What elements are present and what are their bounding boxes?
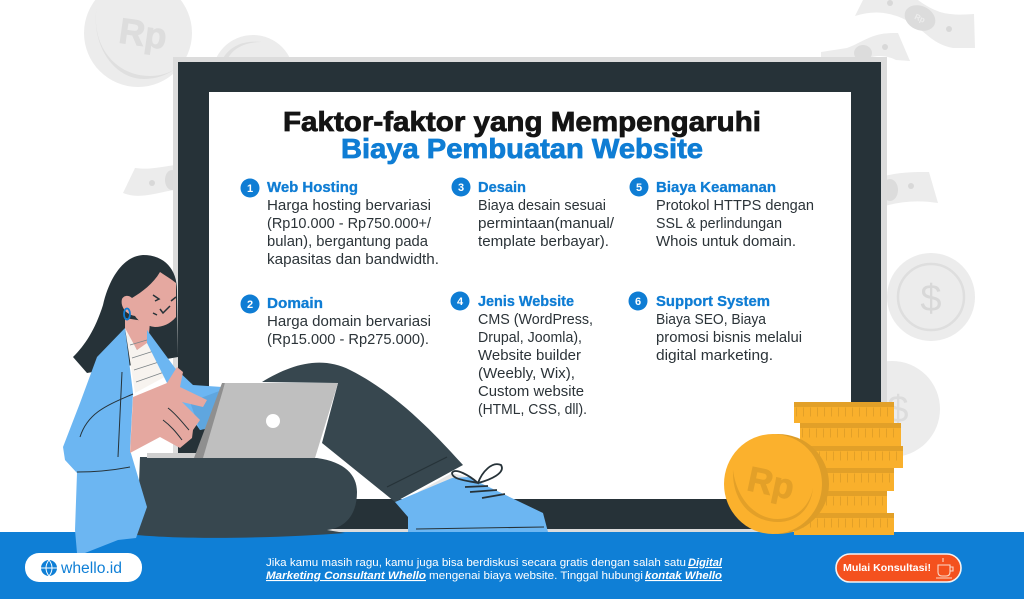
factor 4: jenis website: Jenis Website [478,294,574,310]
factor 2: domain: 2 [247,299,253,311]
factor 4: jenis website: (HTML, CSS, dll). [478,402,587,418]
icon: rupiah coin top left [84,0,192,87]
factor 4: jenis website: (Weebly, Wix), [478,366,575,382]
shoe [395,464,548,532]
icon: dollar coin lower right [844,361,940,457]
factor 6: support system: Biaya SEO, Biaya [656,312,767,328]
factor 4: jenis website [450,292,593,418]
footer message: Marketing Consultant Whello [266,570,426,582]
logo badge [25,553,142,582]
factor 3: desain: 3 [458,182,464,194]
title [283,106,761,164]
factor 1: web hosting: (Rp10.000 - Rp750.000+/ [267,216,432,232]
icon: dollar coin right [887,253,975,341]
logo badge: whello.id [60,560,122,577]
icon: dollar coin lower right: $ [887,389,909,431]
face [122,272,176,327]
factor 1: web hosting: Harga hosting bervariasi [267,198,431,214]
factor 5: biaya keamanan: Whois untuk domain. [656,234,796,250]
lap [137,457,357,538]
factor 5: biaya keamanan: 5 [636,182,642,194]
factor 4: jenis website: 4 [457,296,464,308]
factor 4: jenis website: Drupal, Joomla), [478,330,582,346]
neck [125,318,150,350]
board frame [173,57,887,533]
illustration: woman with laptop [63,255,548,553]
factor 3: desain: template berbayar). [478,234,609,250]
icon: banknote left [123,165,179,196]
jacket [63,328,222,553]
icon: banknote top right [855,0,975,48]
footer message: kontak Whello [645,570,722,582]
icon: coin behind frame [212,35,294,117]
footer message [266,557,723,582]
factor 2: domain: Domain [267,296,323,312]
footer message: Jika kamu masih ragu, kamu juga bisa berdiskusi secara gratis dengan salah satu [266,557,686,569]
call to action button [836,554,961,582]
factor 6: support system: digital marketing. [656,348,773,364]
factor 6: support system [628,292,802,364]
icon: globe [41,560,57,576]
icon: dollar coin right: $ [920,278,942,320]
hand [130,367,207,453]
factor 3: desain [452,178,615,250]
factor 5: biaya keamanan [630,178,814,250]
icon: coffee cup [936,558,953,578]
factor 1: web hosting [240,178,439,268]
title: Faktor-faktor yang Mempengaruhi [283,106,761,137]
footer message: Digital [688,557,723,569]
hair [73,255,178,373]
factor 5: biaya keamanan: Protokol HTTPS dengan [656,198,814,214]
factor 4: jenis website: CMS (WordPress, [478,312,593,328]
laptop [147,383,338,458]
earring [124,308,130,320]
footer bar [0,532,1024,599]
factor 4: jenis website: Website builder [478,348,581,364]
icon: large rupiah coin: Rp [744,460,798,507]
lower leg bent [262,363,463,502]
factor 1: web hosting: 1 [247,183,253,195]
factor 3: desain: permintaan(manual/ [478,216,615,232]
icon: stack of coins [794,402,903,535]
factor 6: support system: promosi bisnis melalui [656,330,802,346]
factor 1: web hosting: kapasitas dan bandwidth. [267,252,439,268]
factor 1: web hosting: bulan), bergantung pada [267,234,429,250]
title: Biaya Pembuatan Website [341,133,703,164]
factor 2: domain [240,294,431,348]
icon: banknote top right: Rp [913,12,927,25]
factor 2: domain: Harga domain bervariasi [267,314,431,330]
factor 4: jenis website: Custom website [478,384,584,400]
factor 2: domain: (Rp15.000 - Rp275.000). [267,332,429,348]
factor 3: desain: Desain [478,180,526,196]
icon: banknote lower right [882,172,938,206]
factor 5: biaya keamanan: SSL & perlindungan [656,216,782,232]
factor 6: support system: 6 [635,296,641,308]
factor 1: web hosting: Web Hosting [267,180,358,196]
call to action button: Mulai Konsultasi! [843,562,931,574]
footer message: mengenai biaya website. Tinggal hubungi [429,570,643,582]
background coins and banknotes [84,0,975,457]
factor 6: support system: Support System [656,294,770,310]
face details [153,295,176,315]
shirt [125,328,172,393]
icon: banknote middle right [821,33,910,62]
icon: rupiah coin top left: Rp [116,10,170,57]
icon: large rupiah coin [724,434,829,534]
factor 5: biaya keamanan: Biaya Keamanan [656,180,776,196]
factor 3: desain: Biaya desain sesuai [478,198,606,214]
